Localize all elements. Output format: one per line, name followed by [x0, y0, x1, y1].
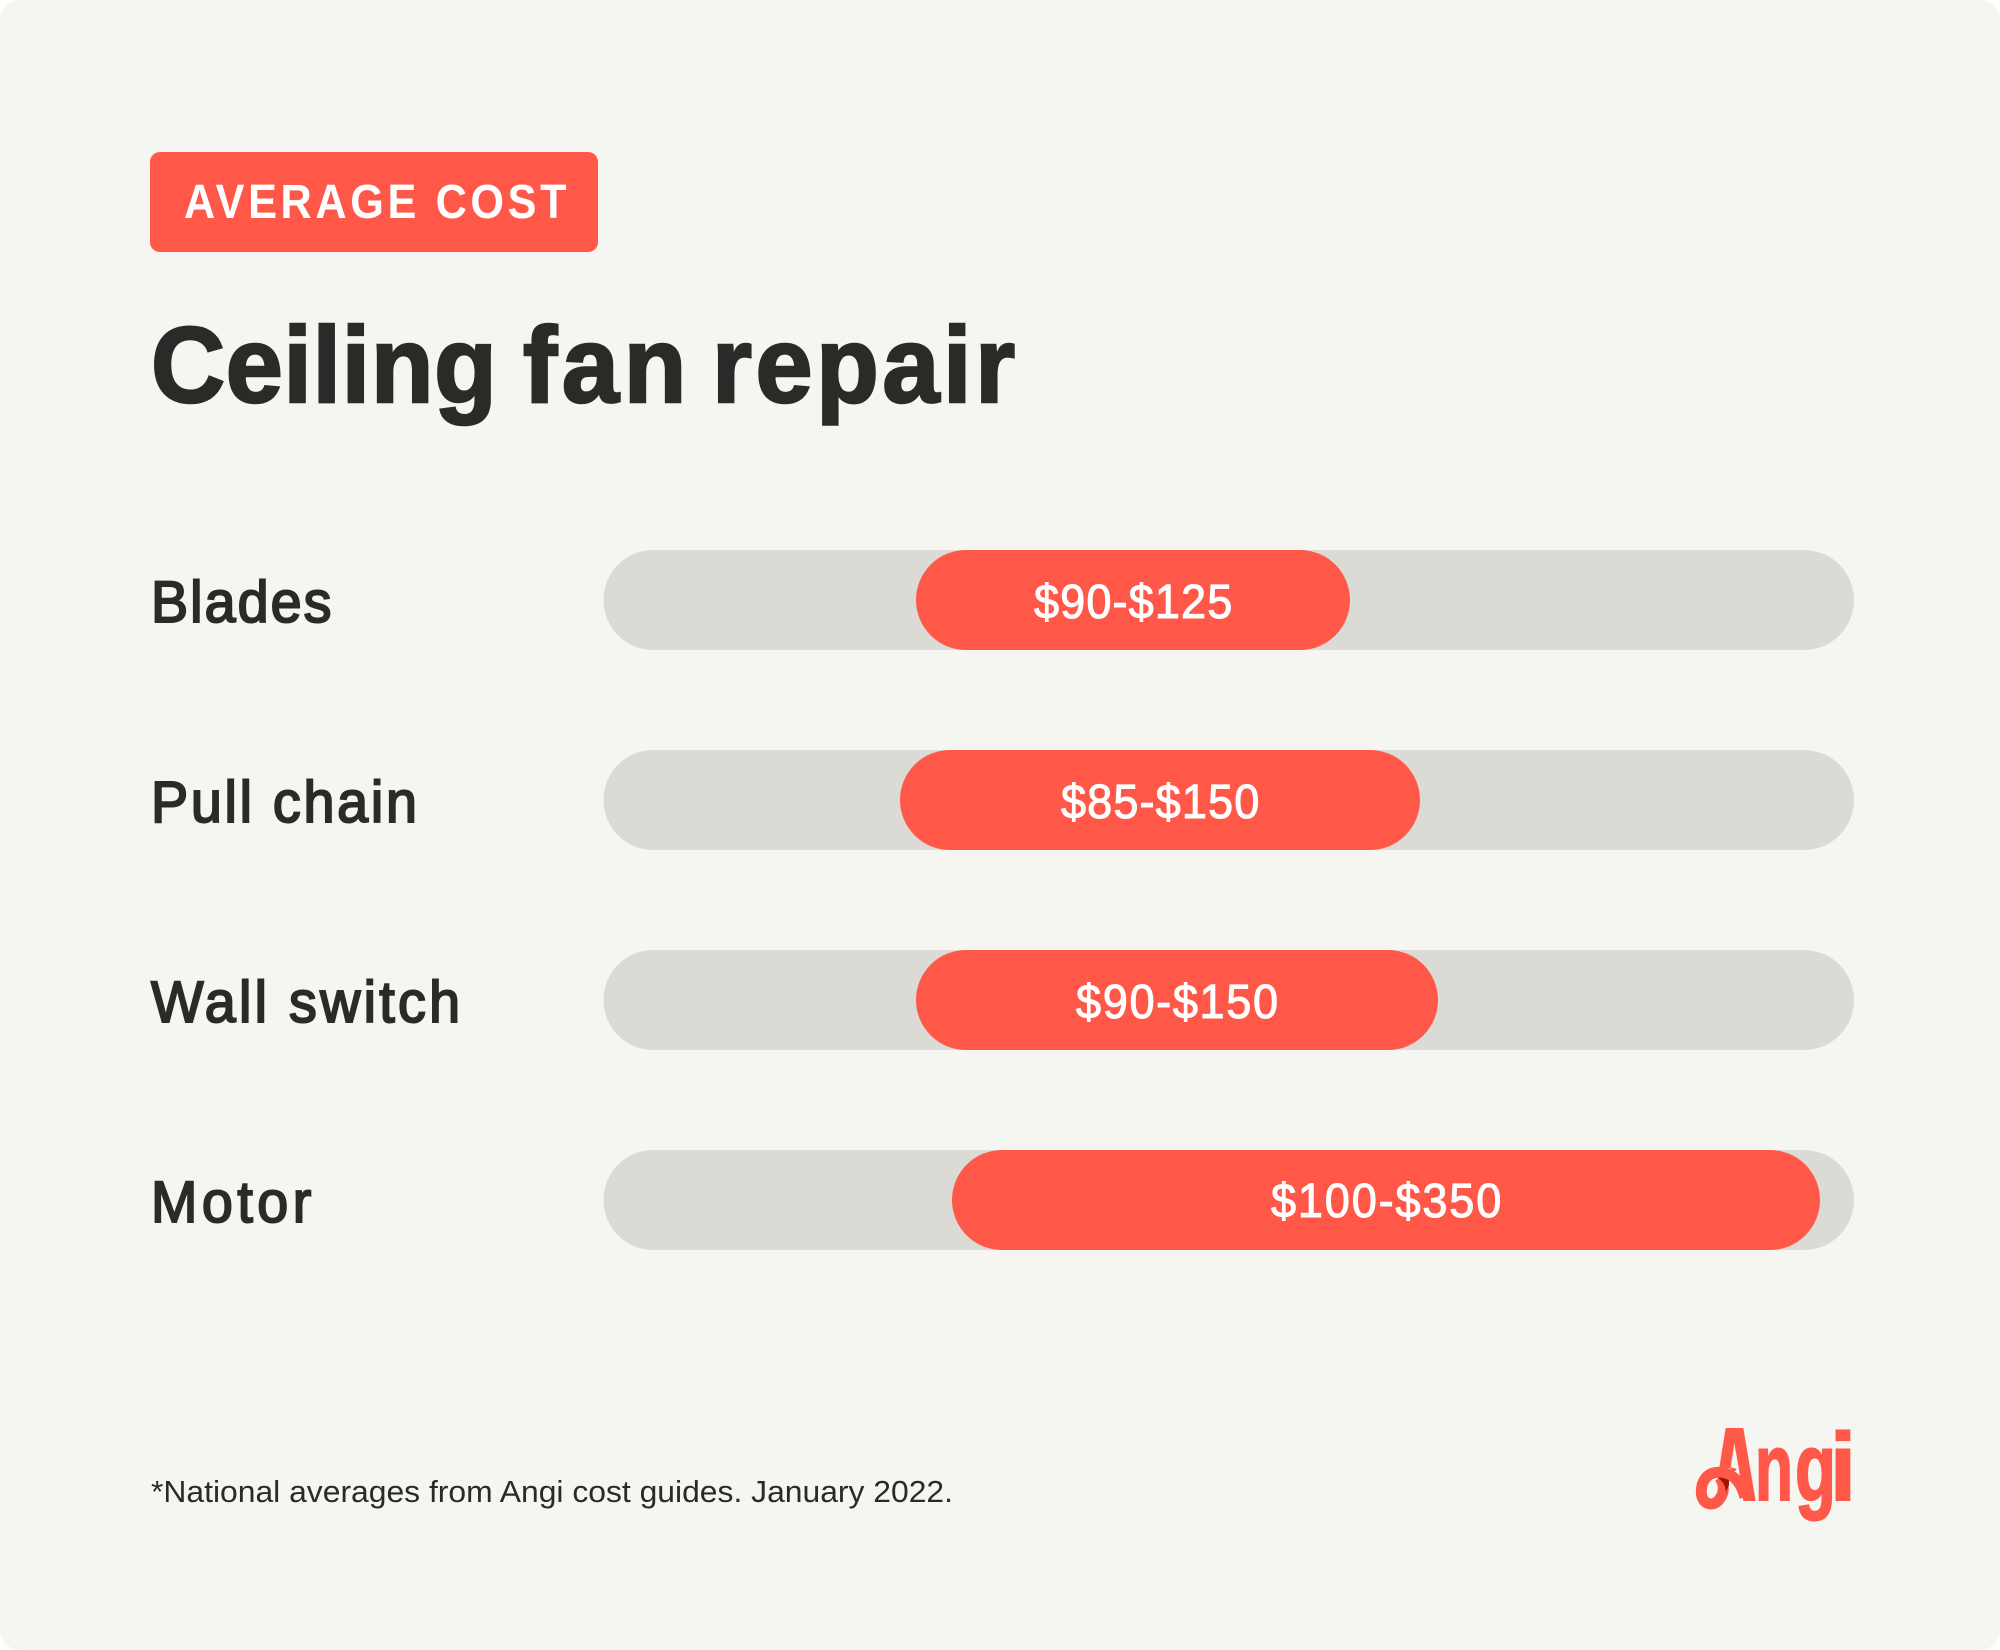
row: Wall switch: $90-$150: [1076, 975, 1278, 1028]
title: Ceiling: [151, 306, 497, 426]
row: Motor: Motor: [151, 1171, 311, 1235]
logo: Angi: A: [1731, 1435, 1749, 1479]
row: Wall switch: [151, 950, 1854, 1050]
logo: Angi: n: [1755, 1414, 1793, 1521]
tag: average cost: AVERAGE COST: [184, 175, 567, 229]
footnote: *National averages from Angi cost guides. January 2022.: [151, 1474, 953, 1509]
logo: Angi: [1701, 1414, 1856, 1521]
row: Blades: Blades: [151, 571, 331, 635]
logo: Angi: g: [1795, 1414, 1836, 1521]
row: Pull chain: $85-$150: [1061, 775, 1259, 828]
title: fan: [523, 306, 686, 426]
row: Pull chain: [151, 750, 1854, 850]
logo: Angi: i: [1830, 1414, 1856, 1521]
row: Motor: [151, 1150, 1854, 1250]
row: Blades: [151, 550, 1854, 650]
row: Blades: $90-$125: [1034, 575, 1232, 628]
row: Motor: $100-$350: [1271, 1174, 1501, 1227]
row: Pull chain: Pull chain: [151, 771, 417, 835]
title: repair: [712, 306, 1015, 426]
tag: average cost: [150, 152, 598, 252]
row: Wall switch: Wall switch: [151, 971, 460, 1035]
title: [151, 306, 1015, 426]
